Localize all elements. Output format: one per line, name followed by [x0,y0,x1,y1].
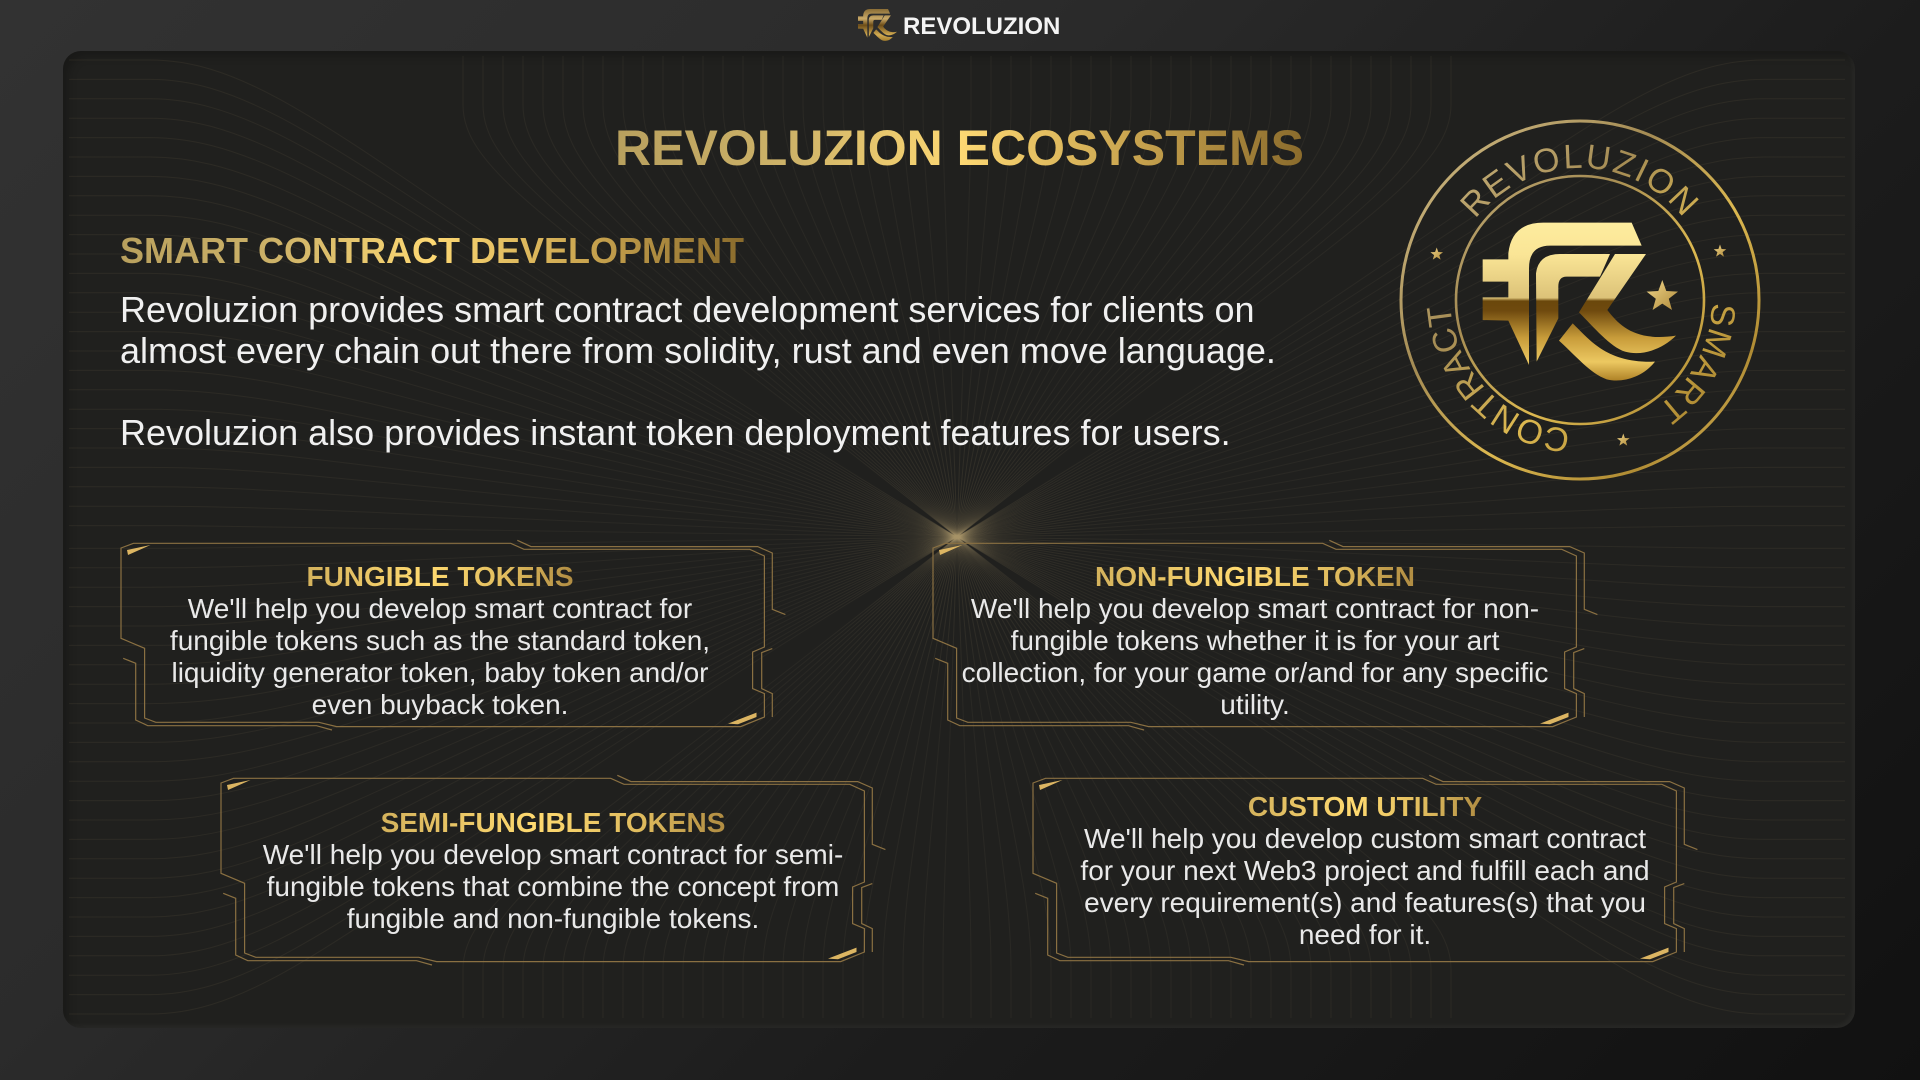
card text: collection, for your game or/and for any specific [962,657,1548,688]
top brand logo: REVOLUZION [903,13,1060,40]
card text: We'll help you develop smart contract for non- [971,593,1539,624]
card text: fungible tokens whether it is for your art [1011,625,1499,656]
section heading: SMART CONTRACT DEVELOPMENT [120,230,744,271]
card: non-fungible token [932,540,1598,731]
card text: NON-FUNGIBLE TOKEN [1095,561,1415,592]
card text [962,561,1548,720]
icon: RK monogram [1483,223,1676,380]
intro text: almost every chain out there from solidity, rust and even move language. [120,330,1276,371]
frame [1032,774,1698,966]
card text: FUNGIBLE TOKENS [306,561,574,592]
intro text: Revoluzion also provides instant token deployment features for users. [120,412,1231,453]
card text: liquidity generator token, baby token and/or [171,657,709,688]
frame [120,540,786,731]
frame [932,540,1598,731]
card text: We'll help you develop custom smart contract [1084,823,1646,854]
intro text [120,289,1276,453]
seal badge [1400,120,1760,480]
card text: fungible and non-fungible tokens. [347,903,759,934]
card text [170,561,710,720]
card text: We'll help you develop smart contract for semi- [263,839,843,870]
card text: fungible tokens such as the standard token, [170,625,710,656]
card text [262,807,843,934]
intro text: Revoluzion provides smart contract development services for clients on [120,289,1255,330]
inner ring [1456,176,1704,424]
frame [220,774,886,966]
icon: small stars [1430,244,1726,446]
card text: need for it. [1299,919,1431,950]
card text: even buyback token. [312,689,568,720]
icon: large star [1647,280,1678,310]
card text: utility. [1220,689,1290,720]
seal text: CONTRACT: CONTRACT [1426,308,1568,452]
top brand logo [858,9,1060,41]
card text: for your next Web3 project and fulfill each and [1080,855,1650,886]
outer ring [1401,121,1759,479]
card text: CUSTOM UTILITY [1248,791,1482,822]
card text: We'll help you develop smart contract for [188,593,692,624]
card text: fungible tokens that combine the concept from [267,871,839,902]
card: fungible tokens [120,540,786,731]
card text: SEMI-FUNGIBLE TOKENS [381,807,725,838]
card: semi-fungible tokens [220,774,886,966]
card text: every requirement(s) and features(s) that you [1084,887,1646,918]
card: custom utility [1032,774,1698,966]
seal text: REVOLUZION: REVOLUZION [1460,144,1699,217]
seal text: SMART: SMART [1664,304,1735,425]
card text [1080,791,1650,950]
title: REVOLUZION ECOSYSTEMS [615,120,1304,176]
